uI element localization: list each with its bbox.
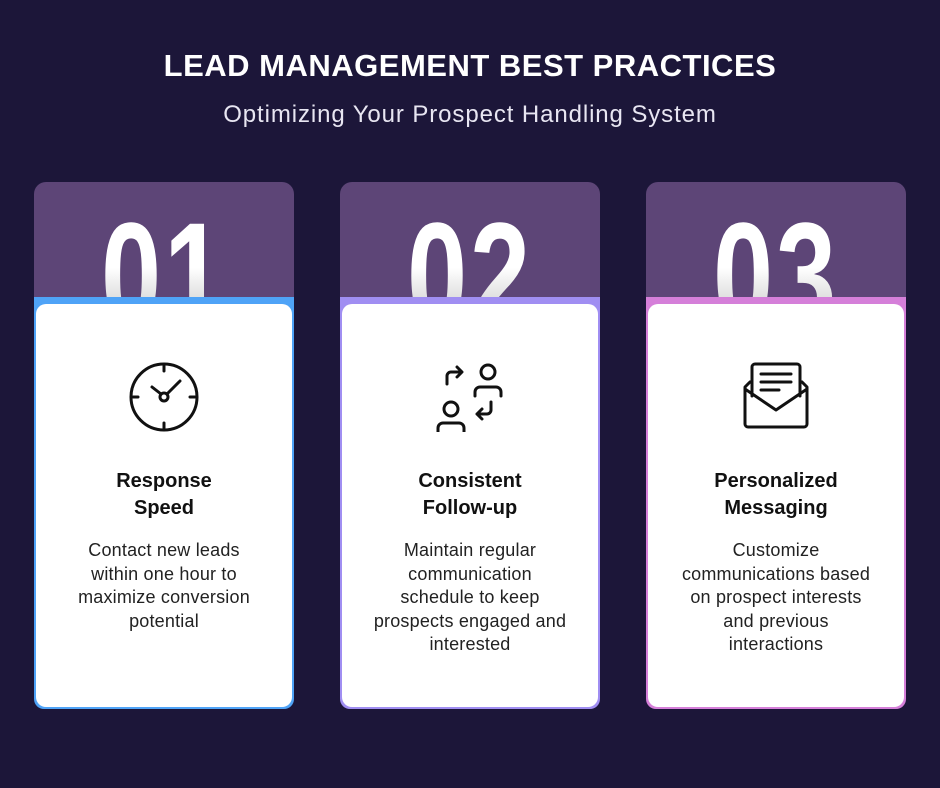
text: maximize conversion bbox=[78, 587, 250, 607]
heading bbox=[714, 470, 838, 519]
text: on prospect interests bbox=[690, 587, 862, 607]
icon: clock bbox=[130, 362, 198, 432]
icon: people exchange bbox=[436, 364, 502, 432]
panel: response speed bbox=[34, 182, 294, 709]
heading: Response bbox=[116, 470, 212, 492]
text: potential bbox=[129, 610, 199, 630]
text: Contact new leads bbox=[88, 540, 240, 560]
text: Customize bbox=[733, 540, 819, 560]
text: and previous bbox=[723, 610, 829, 630]
heading: Messaging bbox=[724, 497, 828, 519]
text bbox=[78, 540, 250, 631]
heading: Speed bbox=[134, 497, 194, 519]
heading: Follow-up bbox=[423, 497, 517, 519]
title: LEAD MANAGEMENT BEST PRACTICES bbox=[164, 48, 776, 83]
text: schedule to keep bbox=[400, 587, 540, 607]
text: prospects engaged and bbox=[374, 610, 566, 630]
heading: Consistent bbox=[418, 470, 522, 492]
subtitle: Optimizing Your Prospect Handling System bbox=[223, 101, 717, 128]
text: communication bbox=[408, 564, 532, 584]
panel: consistent follow-up bbox=[340, 182, 600, 709]
text bbox=[374, 540, 566, 654]
heading bbox=[418, 470, 522, 519]
heading: Personalized bbox=[714, 470, 838, 492]
heading bbox=[116, 470, 212, 519]
text: interested bbox=[429, 634, 511, 654]
text: Maintain regular bbox=[404, 540, 536, 560]
text bbox=[682, 540, 870, 654]
icon: envelope bbox=[743, 362, 809, 428]
text: communications based bbox=[682, 564, 870, 584]
text: interactions bbox=[729, 634, 823, 654]
panel: personalized messaging bbox=[646, 182, 906, 709]
text: within one hour to bbox=[91, 564, 237, 584]
